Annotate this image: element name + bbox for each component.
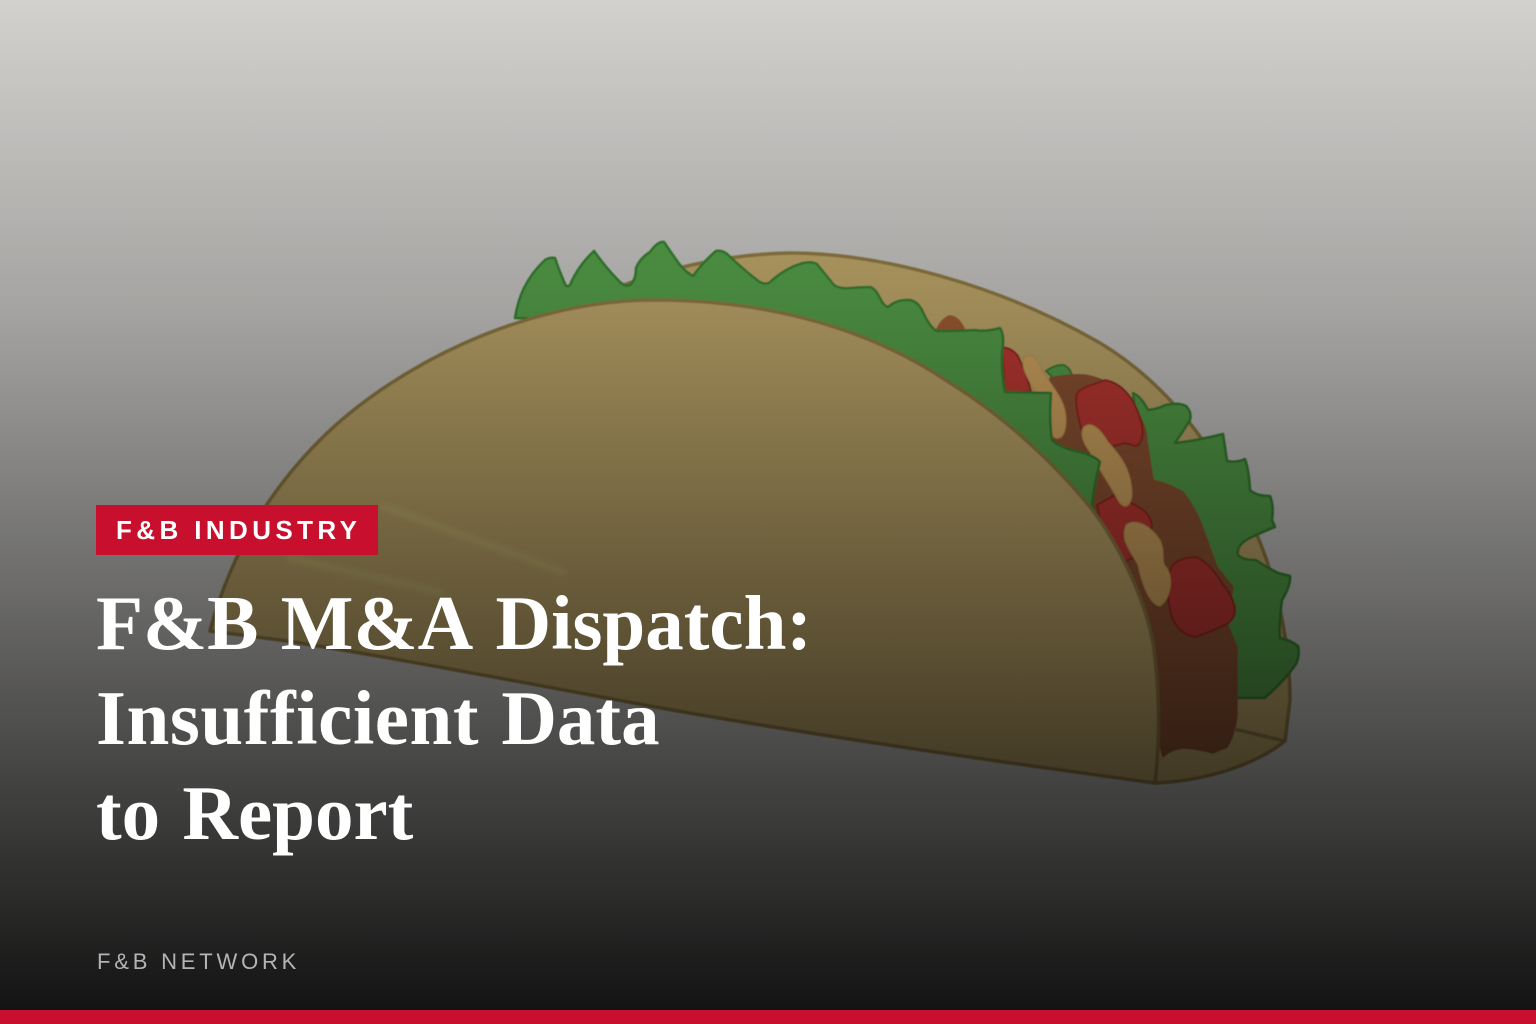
cheese shreds (1023, 356, 1171, 606)
title: Insufficient Data (96, 675, 660, 761)
shell highlights (290, 507, 563, 592)
category tag: F&B INDUSTRY (116, 515, 361, 545)
meat bump (935, 315, 966, 332)
title: F&B M&A Dispatch: (96, 580, 812, 666)
title: to Report (96, 770, 413, 856)
front shell (210, 300, 1159, 783)
category tag (96, 505, 378, 555)
meat filling (1050, 375, 1237, 757)
footer source label: F&B NETWORK (97, 949, 300, 974)
bottom accent bar (0, 1010, 1536, 1024)
tomato pieces (1002, 347, 1235, 637)
back shell (600, 253, 1290, 783)
back lettuce right (1133, 393, 1299, 698)
inner shell floor line (1234, 729, 1285, 741)
small lettuce bit (1046, 365, 1072, 385)
front lettuce (515, 242, 1113, 560)
title (96, 580, 812, 856)
